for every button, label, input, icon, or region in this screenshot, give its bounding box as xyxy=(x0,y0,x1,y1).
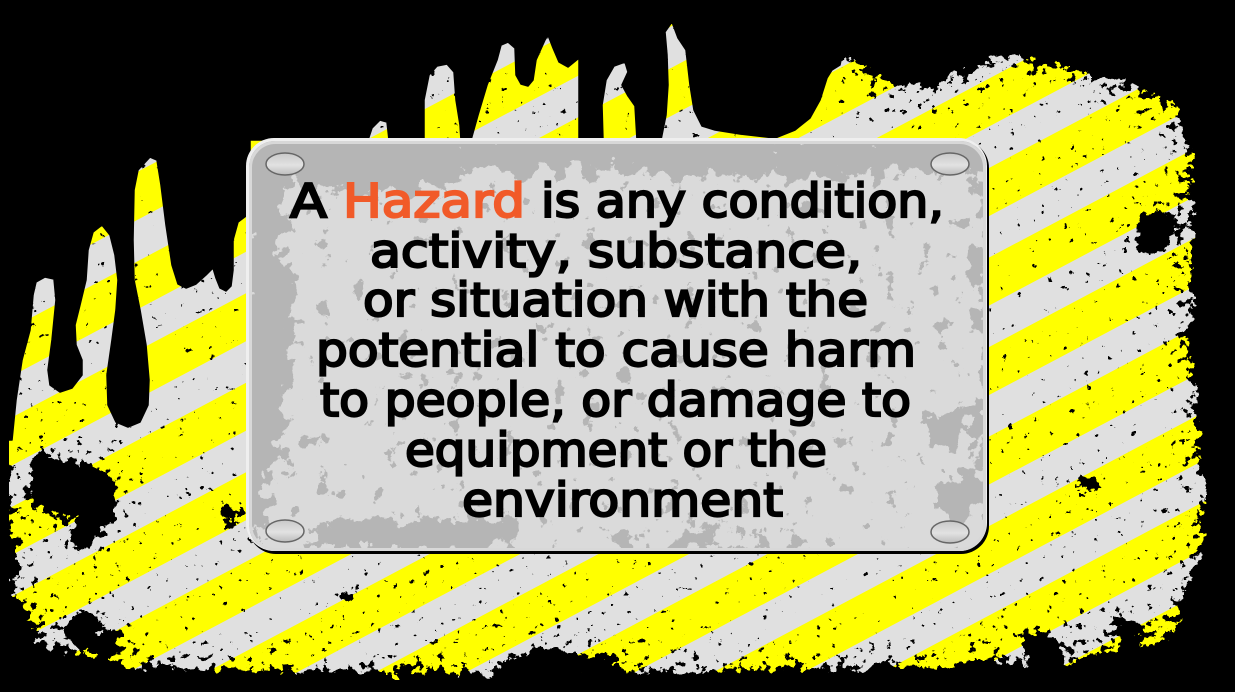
text block: hazard definition: activity, substance, xyxy=(370,224,862,278)
plate light rim xyxy=(250,142,984,550)
rivet: bottom left xyxy=(266,520,304,542)
rivet: top right xyxy=(931,153,969,175)
rivet: bottom right xyxy=(931,521,969,543)
text block: hazard definition xyxy=(290,174,944,527)
text block: hazard definition: equipment or the xyxy=(405,423,827,477)
text block: hazard definition: potential to cause harm xyxy=(316,323,916,377)
line 1 with highlighted word xyxy=(290,174,944,228)
plate wear texture xyxy=(249,141,986,547)
text block: hazard definition: or situation with the xyxy=(363,273,868,327)
panel: metal plate xyxy=(246,138,989,554)
line 1 with highlighted word: Hazard xyxy=(343,174,525,228)
black paint drips xyxy=(0,0,1235,440)
text block: hazard definition: environment xyxy=(462,473,783,527)
text block: hazard definition: to people, or damage to xyxy=(320,373,911,427)
rivet: top left xyxy=(266,153,304,175)
line 1 with highlighted word: A xyxy=(290,174,327,228)
line 1 with highlighted word: is any condition, xyxy=(541,174,944,228)
